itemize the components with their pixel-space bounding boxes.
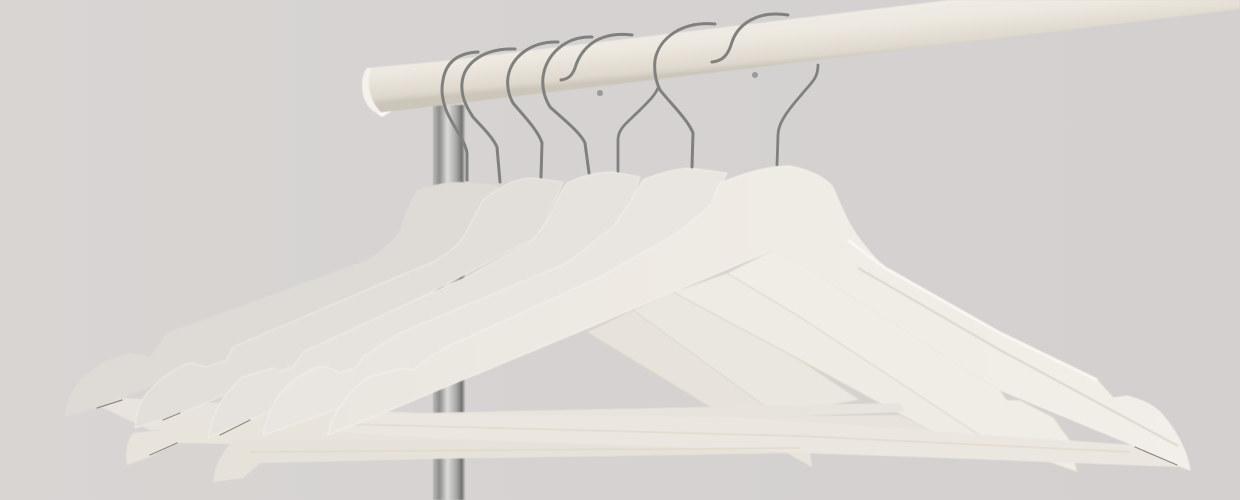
front trouser bar bbox=[250, 414, 1180, 467]
lower trouser bars bbox=[97, 398, 1180, 482]
screw tips under rail bbox=[597, 72, 758, 96]
clothes rail bbox=[362, 0, 1240, 117]
chrome hooks bbox=[442, 14, 788, 182]
hanger 1 bbox=[65, 182, 525, 417]
hanger 4 bbox=[263, 168, 727, 435]
hanger 2 bbox=[135, 178, 563, 428]
rear hook stems behind rail bbox=[618, 65, 818, 172]
shadow slits under hanger tips bbox=[97, 400, 1177, 465]
chrome pole bbox=[433, 105, 465, 500]
hanger 3 bbox=[208, 172, 640, 438]
hanger 5 front bbox=[328, 166, 1190, 470]
rear right arms of the hangers bbox=[587, 250, 1077, 472]
